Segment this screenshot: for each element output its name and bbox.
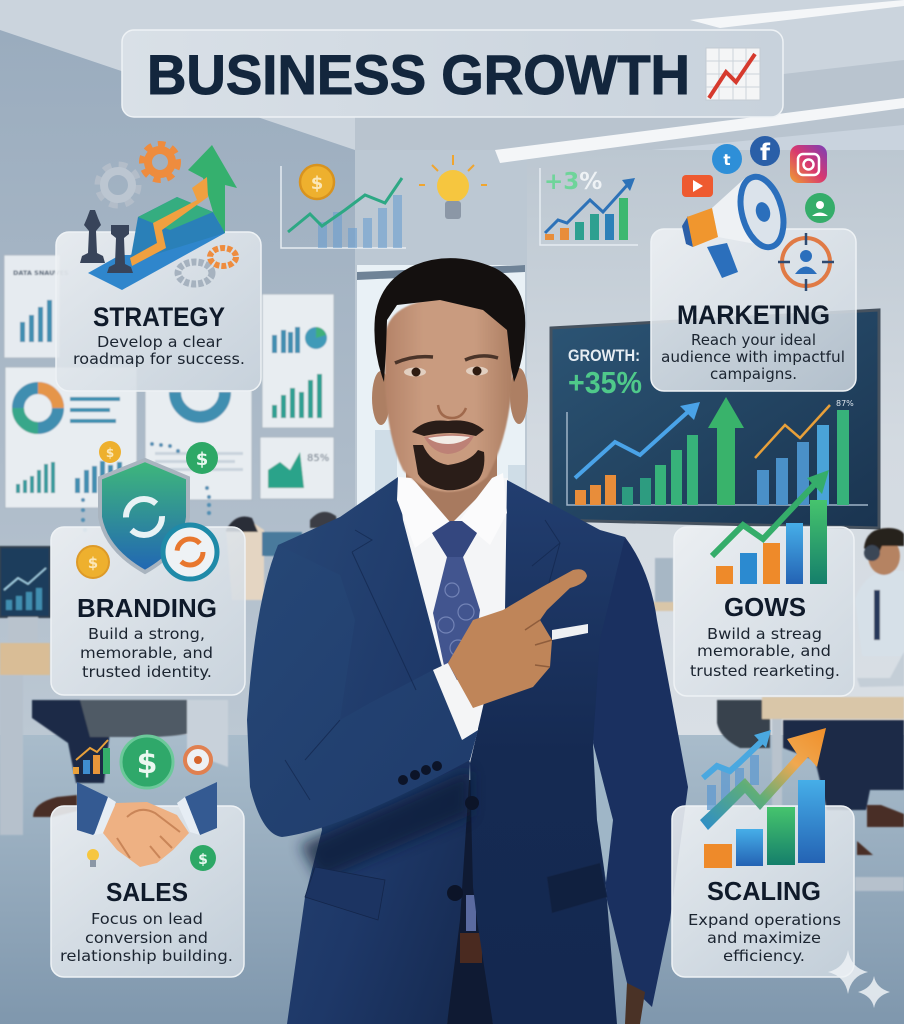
- wall chart +3%: [540, 168, 638, 245]
- nose: [438, 405, 466, 418]
- left desk and monitor: [0, 512, 338, 835]
- growth screen: [551, 310, 879, 528]
- text: branding: Build a strong,: [88, 625, 205, 643]
- teeth: [428, 436, 470, 444]
- icon: scaling bars and arrows: [700, 728, 826, 868]
- panel: sales: [51, 806, 244, 977]
- wall posters: [4, 255, 334, 532]
- text: marketing: audience with impactful: [661, 348, 845, 366]
- growth screen: GROWTH:: [568, 346, 640, 365]
- growth screen: +35%: [568, 365, 642, 400]
- neck: [406, 445, 497, 525]
- icon: handshake and coin: $: [198, 852, 208, 868]
- panel: strategy: [56, 232, 261, 391]
- tie: [432, 526, 480, 680]
- text: gows: memorable, and: [697, 642, 831, 660]
- icon: shield and coins: $: [196, 449, 208, 470]
- icon: handshake and coin: $: [137, 746, 157, 781]
- sleeve right: [593, 537, 688, 1007]
- wall chart with coin: $: [311, 173, 323, 194]
- icon: light bulb: [419, 155, 487, 219]
- text: branding: [80, 625, 213, 681]
- heading: marketing: MARKETING: [677, 300, 830, 330]
- text: branding: memorable, and: [80, 644, 213, 662]
- text: sales: Focus on lead: [91, 910, 203, 928]
- face: [385, 298, 513, 492]
- lapel lines: [285, 520, 560, 800]
- panel: scaling: [672, 806, 854, 977]
- presenter: [247, 258, 688, 1024]
- icon: sparkle: [828, 950, 890, 1008]
- text: gows: Bwild a streag: [707, 625, 822, 643]
- growth screen: 87%: [836, 399, 854, 408]
- pointing hand: [448, 569, 587, 708]
- wall posters: 85%: [307, 453, 329, 464]
- icon: megaphone and social: [682, 136, 835, 291]
- pockets: [305, 863, 607, 920]
- icon: chart: [706, 48, 760, 100]
- pocket square: [552, 624, 588, 640]
- icon: shield and coins: $: [88, 554, 98, 572]
- wall chart with coin: [281, 165, 406, 248]
- text: scaling: [688, 911, 841, 965]
- icon: megaphone and social: t: [723, 151, 731, 169]
- buttons: [398, 761, 479, 901]
- jacket left panel: [278, 477, 470, 1024]
- icon: gows bar chart: [712, 470, 829, 584]
- heading: strategy: STRATEGY: [93, 302, 225, 332]
- text: sales: relationship building.: [60, 947, 233, 965]
- title panel: [122, 30, 783, 117]
- tie knot: [432, 521, 477, 557]
- heading: scaling: SCALING: [707, 876, 821, 906]
- hair: [374, 258, 525, 382]
- heading: branding: BRANDING: [77, 593, 217, 623]
- shadow under forearm: [300, 770, 470, 880]
- text: marketing: campaigns.: [710, 365, 797, 383]
- text: strategy: roadmap for success.: [73, 350, 245, 368]
- text: scaling: Expand operations: [688, 911, 841, 929]
- text: strategy: Develop a clear: [97, 333, 223, 351]
- watch hand: [625, 983, 645, 1024]
- icon: megaphone and social: f: [760, 140, 771, 166]
- text: sales: [60, 910, 233, 965]
- text: gows: [690, 625, 840, 680]
- text: scaling: efficiency.: [723, 947, 805, 965]
- ears: [372, 368, 528, 425]
- wall posters: DATA SNAUVES: [13, 269, 69, 277]
- moustache and goatee: [412, 420, 484, 490]
- wall chart +3%: +3%: [544, 169, 602, 195]
- title text: BUSINESS GROWTH: [147, 43, 690, 106]
- eyes and brows: [395, 356, 498, 376]
- text: marketing: [661, 331, 845, 383]
- panel: branding: [51, 527, 245, 695]
- smile: [424, 434, 474, 454]
- trousers and belt: [447, 780, 493, 1024]
- text: scaling: and maximize: [707, 929, 821, 947]
- panel: gows: [674, 527, 854, 696]
- icon: shield and coins: $: [106, 446, 114, 460]
- icon: shield and coins: [77, 441, 218, 579]
- heading: sales: SALES: [106, 877, 188, 907]
- icon: handshake and coin: [73, 736, 217, 871]
- shirt collar: [397, 473, 507, 548]
- text: sales: conversion and: [85, 929, 208, 947]
- panel: marketing: [651, 229, 856, 391]
- right desk and employee: [650, 528, 904, 891]
- jacket right panel: [470, 480, 625, 1024]
- shirt cuff: [433, 663, 478, 740]
- icon: strategy stairs and gears: [80, 145, 237, 290]
- text: gows: trusted rearketing.: [690, 662, 840, 680]
- gap between arm and torso: [593, 743, 613, 882]
- sleeve left: [247, 545, 478, 837]
- heading: gows: GOWS: [724, 592, 806, 622]
- text: strategy: [73, 333, 245, 368]
- shirt: [396, 478, 508, 763]
- text: branding: trusted identity.: [82, 663, 212, 681]
- text: marketing: Reach your ideal: [691, 331, 816, 349]
